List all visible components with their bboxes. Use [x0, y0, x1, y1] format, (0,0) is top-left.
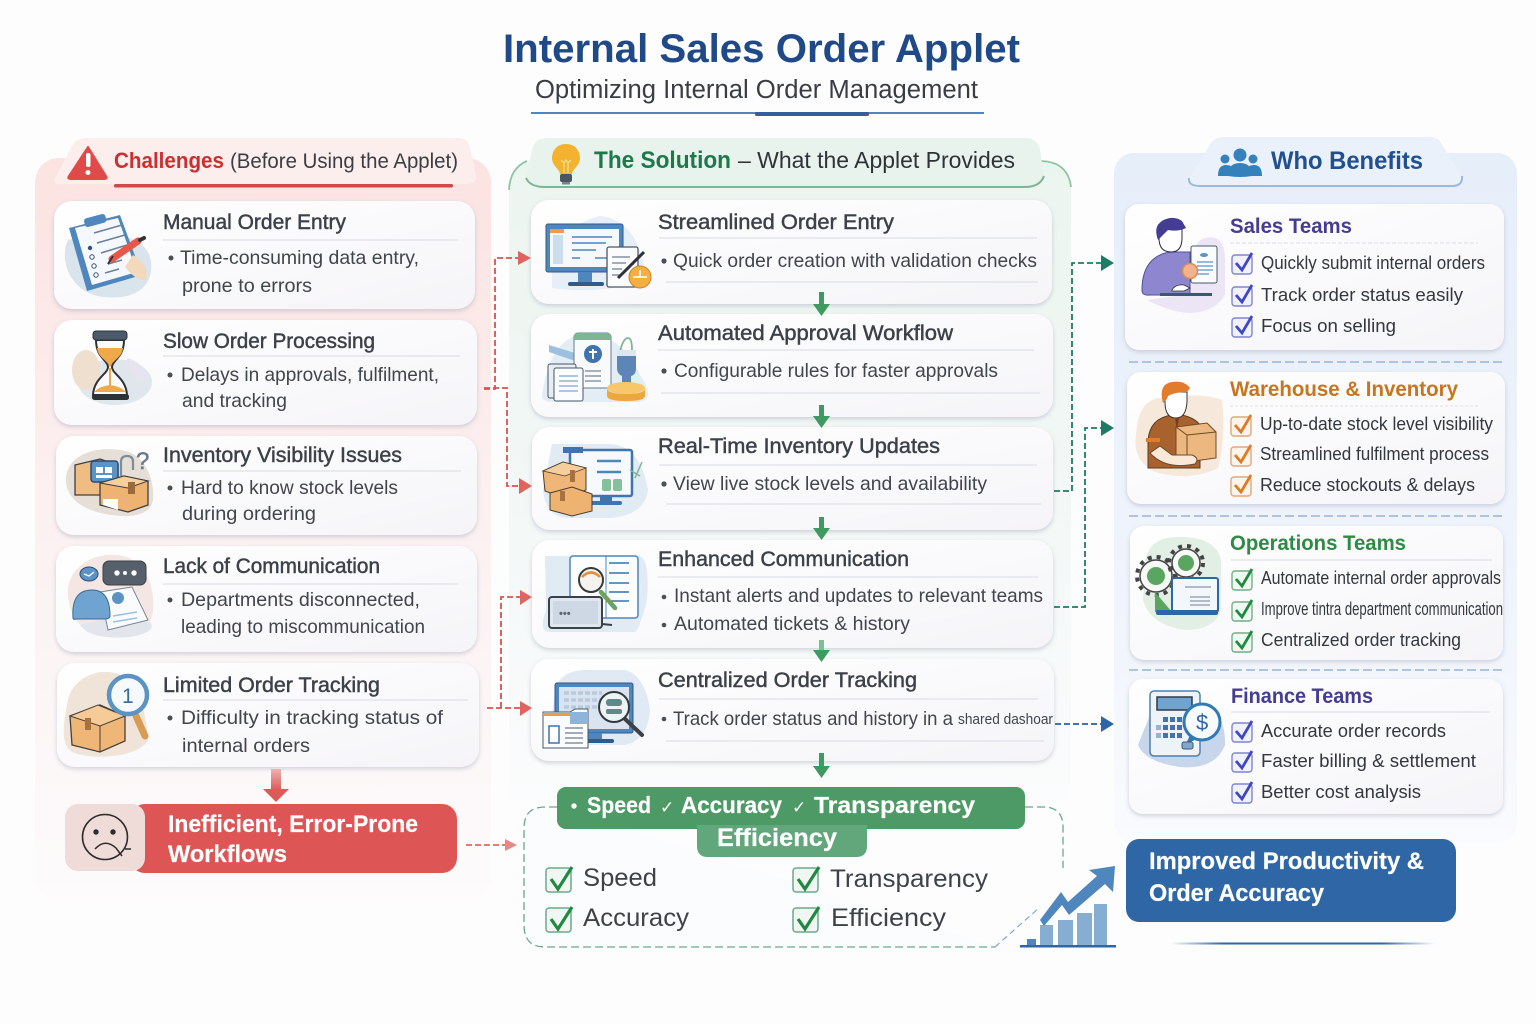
text: centralized order tracking: Track order status and history in a	[673, 708, 953, 730]
card: warehouse and inventory	[1127, 372, 1505, 504]
heading: challenges: Challenges	[114, 148, 224, 173]
arrow: solution to finance	[1055, 716, 1114, 732]
heading: limited order tracking: Limited Order Tracking	[163, 674, 380, 697]
text: manual order entry: prone to errors	[182, 275, 312, 297]
heading: the solution	[526, 138, 1044, 187]
heading: sales teams: Sales Teams	[1230, 215, 1352, 238]
arrow: challenges to outcome	[263, 769, 289, 802]
text: slow order processing: Delays in approvals, fulfilment,	[181, 364, 439, 386]
icon: calculator and dollar: $	[1196, 710, 1208, 735]
heading: warehouse and inventory: Warehouse & Inventory	[1230, 378, 1458, 401]
card: sales teams	[1125, 204, 1504, 350]
heading: the solution: The Solution	[594, 147, 731, 174]
item: efficiency	[793, 904, 947, 932]
icon: warning triangle	[68, 147, 107, 179]
text: manual order entry	[168, 247, 419, 297]
heading: who benefits: Who Benefits	[1271, 147, 1423, 175]
card: lack of communication	[56, 546, 477, 652]
icon: monitor and form	[546, 216, 651, 290]
heading: enhanced communication: Enhanced Communication	[658, 548, 909, 571]
text: slow order processing	[168, 364, 439, 412]
heading: inventory visibility issues: Inventory Visibility Issues	[163, 444, 402, 467]
item: Faster billing & settlement	[1261, 750, 1476, 771]
callout: inefficient workflows: Workflows	[168, 841, 287, 868]
icon: boxes and question mark: ?	[136, 448, 149, 475]
text: inventory visibility issues	[168, 477, 398, 525]
icon: document, magnifier and laptop	[543, 556, 648, 632]
text: manual order entry: Time-consuming data entry,	[180, 247, 419, 269]
item: speed	[546, 864, 657, 892]
callout: inefficient workflows	[65, 804, 457, 873]
card: centralized order tracking	[531, 659, 1054, 761]
panel: who benefits	[1114, 137, 1517, 843]
text: lack of communication	[168, 589, 425, 638]
text: enhanced communication: Automated tickets & history	[674, 613, 910, 635]
banner: speed accuracy transparency efficiency: Transparency	[814, 792, 975, 818]
arrow: challenges to enhanced communication	[501, 590, 532, 708]
item: transparency: Transparency	[830, 865, 989, 893]
arrow: flow 3	[813, 517, 830, 540]
text: limited order tracking: Difficulty in tracking status of	[181, 707, 444, 729]
icon: chat and person	[68, 555, 153, 638]
banner: speed accuracy transparency efficiency: ✓	[660, 798, 674, 818]
text: inventory visibility issues: during ordering	[182, 503, 316, 525]
item: Focus on selling	[1261, 315, 1396, 336]
item: accuracy: Accuracy	[583, 904, 690, 932]
icon: box and magnifier: 1	[122, 685, 134, 708]
heading: real-time inventory updates: Real-Time Inventory Updates	[658, 435, 940, 458]
heading: lack of communication: Lack of Communication	[163, 555, 380, 578]
text: enhanced communication: Instant alerts and updates to relevant teams	[674, 585, 1043, 607]
card: automated approval workflow	[531, 314, 1053, 417]
card: limited order tracking	[57, 663, 479, 767]
text: slow order processing: and tracking	[182, 390, 287, 412]
callout: inefficient workflows: Inefficient, Error-Prone	[168, 811, 418, 838]
panel: key outcomes	[524, 787, 1063, 947]
icon: sales person	[1142, 218, 1225, 313]
item: speed: Speed	[583, 864, 657, 892]
item: Track order status easily	[1261, 284, 1464, 305]
item: Better cost analysis	[1261, 781, 1421, 802]
card: slow order processing	[54, 320, 477, 425]
callout: improved productivity: Order Accuracy	[1149, 880, 1325, 907]
banner: speed accuracy transparency efficiency	[557, 787, 1025, 857]
card: finance teams	[1129, 679, 1503, 814]
icon: boxes and question mark	[66, 448, 153, 516]
item: Centralized order tracking	[1261, 629, 1461, 650]
heading: challenges: (Before Using the Applet)	[230, 150, 458, 173]
text: inventory visibility issues: Hard to know stock levels	[181, 477, 398, 499]
icon: hourglass	[72, 331, 152, 405]
arrow: challenges to order tracking	[487, 701, 532, 716]
arrow: flow 2	[813, 405, 830, 428]
card: manual order entry	[54, 201, 475, 309]
arrow: solution to sales teams	[1054, 255, 1114, 491]
icon: monitor and boxes	[543, 444, 648, 518]
heading: who benefits	[1189, 137, 1462, 186]
icon: box and magnifier	[64, 672, 148, 757]
item: efficiency: Efficiency	[831, 904, 947, 932]
heading: the solution: – What the Applet Provides	[738, 147, 1015, 173]
callout: improved productivity: Improved Productivity &	[1149, 848, 1424, 875]
heading: challenges	[54, 138, 476, 188]
arrow: flow 5	[813, 753, 830, 778]
heading: slow order processing: Slow Order Processing	[163, 330, 375, 353]
text: centralized order tracking: shared dashoar	[958, 711, 1053, 728]
heading: manual order entry: Manual Order Entry	[163, 211, 346, 234]
arrow: flow 1	[813, 292, 830, 316]
card: inventory visibility issues	[56, 436, 477, 535]
item: Automate internal order approvals	[1261, 567, 1501, 588]
text: limited order tracking	[168, 707, 444, 757]
icon: growth chart	[1020, 866, 1116, 948]
heading: operations teams: Operations Teams	[1230, 532, 1406, 555]
icon: document, magnifier and laptop: •••	[559, 608, 571, 620]
card: enhanced communication	[532, 540, 1053, 648]
title block	[503, 27, 1020, 116]
arrow: solution to warehouse	[1054, 420, 1114, 607]
text: streamlined order entry: Quick order creation with validation checks	[673, 250, 1037, 272]
arrow: challenges to streamlined entry	[484, 251, 531, 389]
icon: calculator and dollar	[1138, 691, 1225, 767]
item: Up-to-date stock level visibility	[1260, 413, 1494, 434]
text: lack of communication: Departments disconnected,	[181, 589, 420, 611]
subtitle: Optimizing Internal Order Management	[535, 76, 978, 104]
item: Quickly submit internal orders	[1261, 252, 1485, 273]
icon: sad face	[65, 804, 145, 871]
title underline	[531, 112, 984, 116]
card: operations teams	[1130, 526, 1503, 660]
banner: speed accuracy transparency efficiency: ✓	[792, 798, 806, 818]
item: Accurate order records	[1261, 720, 1446, 741]
arrow: workflows to outcomes	[466, 839, 517, 851]
text: lack of communication: leading to miscommunication	[181, 616, 425, 638]
icon: light bulb	[552, 144, 580, 184]
panel: challenges	[35, 138, 491, 900]
arrow: flow 4	[813, 640, 830, 662]
text: real-time inventory updates: View live stock levels and availability	[673, 473, 987, 495]
icon: people	[1218, 148, 1262, 177]
icon: gears and laptop	[1137, 537, 1221, 630]
icon: approval document and stamp	[542, 333, 648, 402]
text: automated approval workflow: Configurable rules for faster approvals	[674, 360, 998, 382]
card: streamlined order entry	[531, 200, 1052, 304]
panel: the solution	[509, 138, 1071, 947]
item: Streamlined fulfilment process	[1260, 443, 1489, 464]
banner: speed accuracy transparency efficiency: Speed	[587, 792, 651, 818]
text: enhanced communication	[662, 585, 1043, 635]
banner: speed accuracy transparency efficiency: Efficiency	[717, 824, 837, 852]
icon: dashboard and magnifier	[543, 670, 650, 748]
arrow: challenges to inventory updates	[484, 388, 532, 494]
card: real-time inventory updates	[532, 427, 1053, 530]
heading: streamlined order entry: Streamlined Order Entry	[658, 211, 895, 234]
banner: speed accuracy transparency efficiency: Accuracy	[681, 792, 782, 818]
heading: finance teams: Finance Teams	[1231, 685, 1373, 708]
icon: clipboard and pencil	[65, 213, 151, 298]
icon: warehouse worker	[1135, 382, 1223, 476]
item: Reduce stockouts & delays	[1260, 474, 1475, 495]
text: limited order tracking: internal orders	[182, 735, 310, 757]
callout: improved productivity	[1126, 839, 1456, 922]
title: Internal Sales Order Applet	[503, 27, 1020, 71]
heading: centralized order tracking: Centralized Order Tracking	[658, 669, 917, 692]
heading: automated approval workflow: Automated Approval Workflow	[658, 322, 954, 345]
